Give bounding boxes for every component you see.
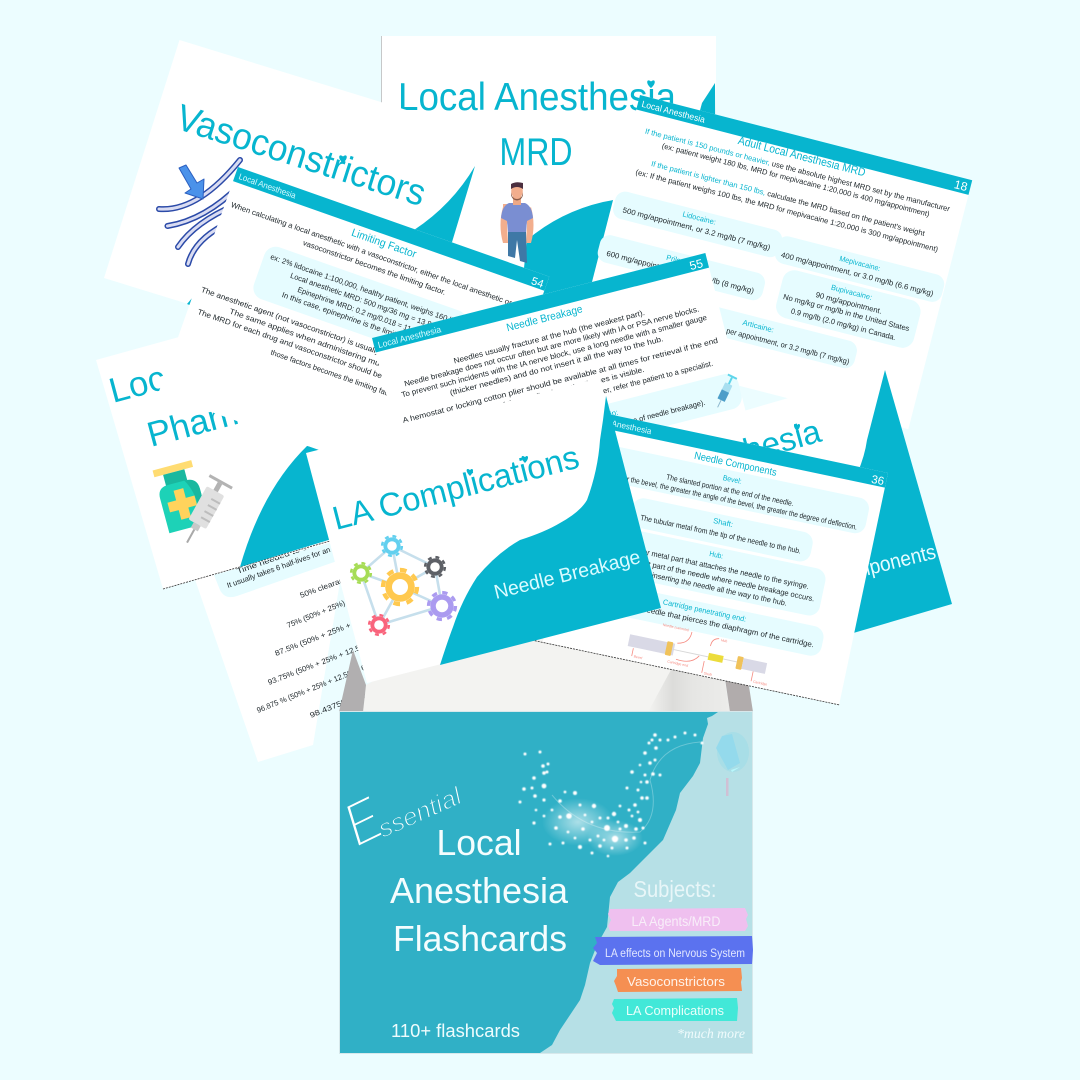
title: Local Anesthesia Flashcards: Local (436, 822, 522, 863)
heading: Needle Components (693, 450, 778, 479)
gear: red (369, 615, 389, 635)
pill: prilocaine (596, 233, 767, 302)
card: Needle Components (36): Local Anesthesia (590, 414, 653, 436)
pill: prilocaine: Prilocaine: (665, 253, 701, 270)
title text: Local Anesthesia (574, 412, 825, 515)
pill: hub: The outer metal part that attaches the needle to the syringe. (618, 542, 810, 591)
title text (398, 76, 676, 174)
icon: connected gears (351, 536, 456, 635)
pill: bevel: The longer the bevel, the greater the angle of the bevel, the greater the degree of deflection. (598, 468, 858, 532)
title text: MRD (500, 131, 572, 174)
half-life percentage list: 93.75% (50% + 25% + 12.5% + 6.25%) (266, 628, 401, 687)
diagram: needle parts: Cartridge (753, 680, 768, 687)
heading: Needle Breakage (505, 303, 584, 334)
dosing rules (634, 127, 951, 254)
explanation text: To prevent such incidents with the IA nerve block, use a long needle with a smaller gauge (400, 313, 708, 399)
header bar (588, 410, 888, 488)
explanation text: The MRD for each drug and vasoconstrictor should be calculated, and whichever of (196, 307, 483, 416)
title text: Local Anesthesia (105, 304, 371, 411)
half-life percentage list: 98.4375% (all) (308, 689, 368, 720)
gear: yellow (383, 570, 417, 604)
subject tag: LA Complications: LA Complications (626, 1003, 724, 1018)
half-life percentage list: 87.5% (50% + 25% + 12.5%) (273, 610, 380, 658)
explanation text: Needles usually fracture at the hub (the weakest part). (453, 308, 646, 365)
pill: lidocaine (611, 189, 784, 259)
icon: syringe (176, 474, 233, 549)
title: Local Anesthesia Flashcards (390, 822, 569, 959)
icon: fairy silhouette (716, 732, 749, 796)
pill: bupivacaine: 0.9 mg/lb (2.0 mg/kg) in Canada. (790, 306, 897, 342)
heading: Limiting Factor (350, 227, 418, 261)
title text: Vasoconstrictors (172, 97, 431, 214)
gear: purple (428, 592, 456, 620)
explanation text: In this case, epinephrine is the limiting factor (281, 290, 428, 349)
teal wave shape (440, 396, 661, 665)
header bar (233, 167, 549, 291)
diagram: needle parts: Shaft (703, 671, 712, 677)
half-life intro text: It usually takes 6 half-lives for an agent (226, 538, 352, 590)
pill: cartridge penetrating end: The end of the needle that pierces the diaphragm of the cartridge. (590, 593, 815, 649)
icon: standing man (500, 182, 534, 263)
explanation text: The same applies when administering multiple types of agents. (228, 307, 458, 395)
card: Needle Breakage (55): Local Anesthesia (377, 324, 442, 350)
explanation text: those factors becomes the limiting factor. (269, 348, 400, 401)
subject tag: Vasoconstrictors: Vasoconstrictors (627, 974, 725, 989)
diagram: needle parts: Hub (720, 638, 728, 643)
much more note: *much more (677, 1027, 745, 1042)
title: Local Anesthesia Flashcards: Flashcards (393, 918, 567, 959)
gear: green (351, 563, 371, 583)
tip pill (438, 371, 744, 482)
pill: hub: Avoid inserting the needle all the way to the hub. (631, 566, 788, 608)
heading: Adult Local Anesthesia MRD (737, 135, 867, 179)
icon: medicine bottle (153, 460, 209, 533)
diagram: needle parts: Cartridge end (667, 660, 689, 668)
pill: prilocaine: 600 mg/appointment, or 3.6 mg/lb (8 mg/kg) (605, 249, 755, 295)
flashcard count: 110+ flashcards (391, 1021, 520, 1041)
teal corner shape (520, 83, 716, 305)
pill: cartridge penetrating end (579, 578, 826, 658)
explanation text: vasoconstrictor becomes the limiting factor. (302, 238, 447, 297)
explanation text: If the fragment is not visible or cannot be retrieved safely with the plier, refer the patient to a specialist. (382, 359, 714, 451)
gear: dark grey (425, 557, 445, 577)
card: Needle Components title (540, 370, 952, 640)
card: Needle Breakage (55) (356, 253, 765, 575)
card: half-life table (190, 500, 417, 762)
title: Essential script (333, 781, 467, 861)
explanation text: (thicker needles) and do not insert it all the way to the hub. (449, 334, 664, 397)
pill: mepivacaine (773, 234, 946, 304)
explanation text: of the needle above the tissues is visible. (498, 365, 645, 411)
tip pill: Management tip: (562, 408, 619, 430)
pill: bevel (586, 441, 871, 535)
teal corner shape (240, 446, 345, 567)
pill: bevel: The slanted portion at the end of the needle. (665, 472, 795, 508)
subtitle on teal: Components (828, 541, 938, 589)
dosing rules: If the patient is lighter than 150 lbs, calculate the MRD based on the patient's weight (650, 159, 927, 238)
subject tag: LA Agents/MRD (608, 908, 748, 931)
teal corner shape (800, 370, 952, 634)
box interior and flaps (339, 630, 753, 712)
header bar (372, 253, 709, 353)
card: Vasoconstrictors title (104, 40, 484, 372)
icon: syringe (713, 374, 737, 410)
card: Adult Local Anesthesia MRD (18): Local Anesthesia (641, 99, 706, 125)
title: Local Anesthesia Flashcards: Anesthesia (390, 870, 569, 911)
page number: 36 (870, 474, 885, 488)
pill: shaft: The tubular metal from the tip of the needle to the hub. (640, 513, 802, 556)
card: Adult Local Anesthesia MRD (18) (574, 95, 972, 429)
icon: constricted blood vessels and arrow (159, 160, 240, 264)
card: Limiting Factor (54): Local Anesthesia (237, 171, 298, 201)
pill: bupivacaine: Bupivacaine: (830, 283, 873, 302)
dosing rules: If the patient is 150 pounds or heavier, use the absolute highest MRD set by the manufacturer (644, 127, 951, 214)
subtitle on teal: Needle Breakage (492, 546, 643, 604)
dosing rules: (ex: patient weight 180 lbs, MRD for mepivacaine 1:20,000 is 400 mg/appointment) (661, 141, 931, 219)
card: LA Complications title (306, 378, 661, 683)
pill: bupivacaine: No mg/kg or mg/lb in the United States (782, 292, 911, 333)
pill: shaft (629, 496, 815, 564)
subject tag: LA effects on Nervous System: LA effects on Nervous System (605, 948, 745, 960)
dosing rules: (ex: If the patient weighs 100 lbs, the MRD for mepivacaine 1:20,000 is 300 mg/appointment) (635, 167, 940, 254)
header bar (636, 95, 972, 195)
pill: lidocaine: 500 mg/appointment, or 3.2 mg/lb (7 mg/kg) (622, 205, 772, 252)
explanation text: Local anesthetic MRD: 500 mg/36 mg = 13.8 (289, 271, 433, 329)
card: Needle Components (36) (505, 403, 888, 705)
half-life percentage list: 96.875 % (50% + 25% + 12.5% + 6.25% + 3.125%) (255, 643, 417, 715)
title text: Local Anesthesia (398, 76, 676, 119)
pill: articaine: Maximum of 500 mg per appointment, or 3.2 mg/lb (7 mg/kg) (660, 309, 851, 366)
card: Limiting Factor (54) (158, 167, 549, 503)
diagram: needle parts (625, 617, 775, 688)
half-life percentage list (255, 561, 417, 720)
explanation text: Needle breakage does not occur often but are more likely with IA or PSA nerve blocks. (403, 304, 700, 388)
subject tag: LA Agents/MRD: LA Agents/MRD (632, 914, 721, 929)
subject tag: Vasoconstrictors (614, 968, 742, 992)
light torn panel (540, 712, 752, 1053)
box front panel (333, 712, 753, 1054)
page number: 18 (953, 177, 969, 194)
title: Essential script: ssential (374, 781, 467, 843)
subject tag: LA Complications (612, 998, 738, 1021)
card: Local Anesthesia MRD title (381, 36, 716, 306)
pill: mepivacaine: Mepivacaine: (839, 254, 881, 273)
page number: 55 (688, 256, 705, 273)
pill: bupivacaine: 90 mg/appointment. (815, 290, 883, 316)
example pill background (250, 243, 470, 366)
explanation text: The anesthetic agent (not vasoconstrictor) is usually the limiting factor in most cases. (200, 285, 493, 396)
title text: LA Complications (329, 438, 583, 537)
explanation text: ex: 2% lidocaine 1:100,000, healthy patient, weighs 160 lbs (269, 252, 460, 327)
half-life intro text: Time needed to clear the drug: (236, 524, 361, 576)
title text: Pharmacology (143, 359, 370, 455)
pill: hub: Hub: (709, 549, 724, 561)
teal corner shape (400, 166, 475, 290)
half-life percentage list: 75% (50% + 25%) (285, 598, 347, 630)
pill: hub: The weakest part of the needle where needle breakage occurs. (608, 551, 815, 603)
pill: bupivacaine (773, 268, 923, 350)
pill: hub (596, 524, 828, 618)
explanation text: When calculating a local anesthetic with a vasoconstrictor, either the local anesthetic or the (230, 200, 525, 312)
pill: cartridge penetrating end: Cartridge penetrating end: (662, 597, 747, 624)
subject tag: LA effects on Nervous System (593, 936, 753, 965)
subjects heading: Subjects: (634, 876, 716, 902)
pill: shaft: Shaft: (712, 516, 734, 529)
explanation text: A hemostat or locking cotton plier should be available at all times for retrieval if the end (402, 336, 719, 425)
title: Essential script: E (333, 783, 394, 861)
gear: blue (382, 536, 402, 556)
pill: mepivacaine: 400 mg/appointment, or 3.0 mg/lb (6.6 mg/kg) (780, 250, 935, 298)
explanation text (188, 200, 525, 430)
explanation text: Epinephrine MRD: 0.2 mg/0.018 = 11.1 (296, 285, 418, 335)
pill: articaine: Articaine: (742, 318, 775, 335)
half-life percentage list: 50% clearance after one (299, 561, 386, 600)
diagram: needle parts: Needle (cannula) (662, 623, 689, 632)
tip pill: Never bend the needle or insert it to the hub (the main cause of needle breakage). (442, 398, 706, 473)
pill: lidocaine: Lidocaine: (682, 210, 717, 227)
card: Local Anesthesia Pharmacology title (96, 295, 398, 589)
explanation text (366, 292, 724, 451)
pill: bevel: Bevel: (722, 473, 742, 486)
diagram: needle parts: Bevel (633, 654, 643, 660)
sparkle trail (518, 732, 704, 857)
page number: 54 (530, 275, 545, 291)
